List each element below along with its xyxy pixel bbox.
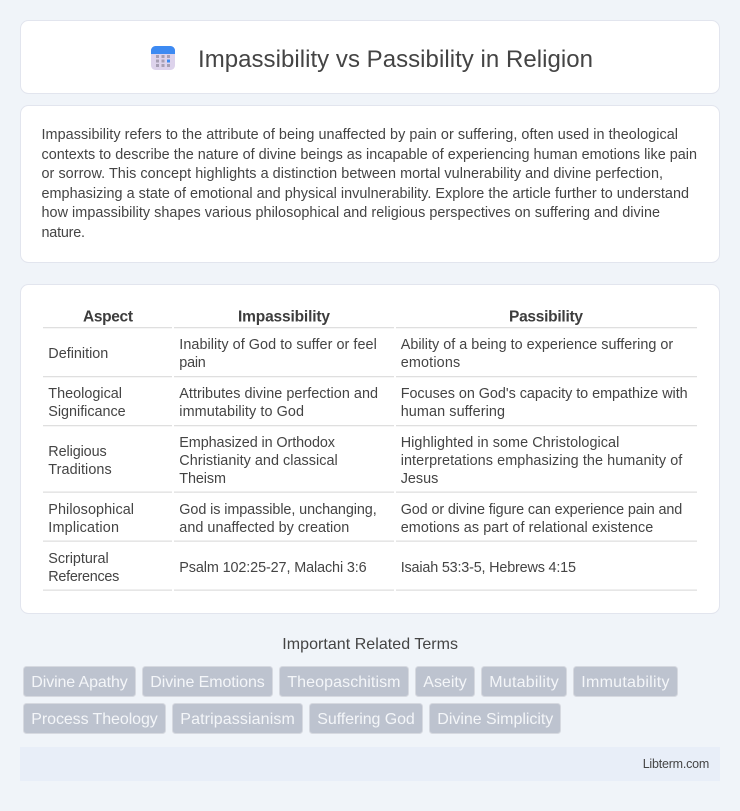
table row: philosophical implication: Implication [48,520,119,536]
tag list: related terms [24,666,678,734]
tag: Divine Emotions: Divine Emotions [150,674,265,691]
table header row [43,308,697,328]
icon: calendar [151,46,175,70]
table row: religious traditions: Emphasized in Orthodox [179,435,336,451]
table row: definition: pain [179,355,206,371]
table row: scriptural references: Isaiah 53:3-5, Hebrews 4:15 [401,560,576,576]
table header row: Impassibility [238,308,330,326]
table row: definition: Ability of a being to experience suffering or [401,337,673,353]
table row: religious traditions: Religious [48,444,107,460]
table header row: Passibility [509,308,583,326]
table row: theological significance: Significance [48,404,126,420]
table row: theological significance: Theological [48,386,122,402]
table row: theological significance: Focuses on God's capacity to empathize with [401,386,688,402]
text block: introduction paragraph: how impassibility shapes various philosophical and religious perspectives on suffering and divine [42,205,660,221]
table row: scriptural references: Psalm 102:25-27, Malachi 3:6 [179,560,367,576]
table row: scriptural references: Scriptural [48,551,109,567]
tag: Aseity [416,666,474,696]
table row: scriptural references: References [48,569,119,585]
tag: Mutability [482,666,566,696]
tag: Divine Apathy [24,666,136,696]
tag: Theopaschitism: Theopaschitism [287,674,400,691]
heading: important related terms: Important Related Terms [282,636,458,653]
tag: Immutability [574,666,678,696]
table row: philosophical implication: God is impassible, unchanging, [179,502,377,518]
table row: philosophical implication: God or divine figure can experience pain and [401,502,682,518]
tag: Theopaschitism [280,666,408,696]
text block: introduction paragraph: emphasizing a state of emotional and physical invulnerability. Explore the article further to understand [42,186,689,202]
table header row: Aspect [83,308,133,326]
text block: introduction paragraph: or sorrow. This concept highlights a distinction between mortal vulnerability and divine perfection, [42,166,663,182]
table row: religious traditions: Highlighted in some Christological [401,435,619,451]
tag: Aseity: Aseity [423,674,467,691]
text block: introduction paragraph: contexts to describe the nature of divine beings as incapable of experiencing human emotions like pain [42,147,697,163]
footer [20,747,720,781]
tag: Divine Simplicity [430,704,560,734]
table row: philosophical implication [43,502,697,542]
table row: definition: emotions [401,355,460,371]
table row: definition: Inability of God to suffer or feel [179,337,377,353]
text block: introduction paragraph: Impassibility refers to the attribute of being unaffected by pain or suffering, often used in theological [42,127,678,143]
table row: religious traditions [43,435,697,493]
tag: Suffering God [310,704,422,734]
title: Impassibility vs Passibility in Religion [198,46,593,73]
table row: religious traditions: Christianity and classical [179,453,338,469]
text block: introduction paragraph: nature. [42,225,85,241]
table row: religious traditions: Theism [179,471,226,487]
tag: Patripassianism: Patripassianism [180,711,295,728]
tag: Mutability: Mutability [489,674,559,691]
table row: philosophical implication: emotions as part of relational existence [401,520,653,536]
tag: Divine Emotions [142,666,272,696]
table row: theological significance [43,386,697,426]
table row: theological significance: human suffering [401,404,505,420]
table row: philosophical implication: and unaffected by creation [179,520,349,536]
tag: Patripassianism [172,704,302,734]
tag: Suffering God: Suffering God [317,711,415,728]
table row: theological significance: immutability to God [179,404,304,420]
tag: Divine Apathy: Divine Apathy [31,674,128,691]
panel: introduction [20,106,720,262]
table row: theological significance: Attributes divine perfection and [179,386,378,402]
table row: religious traditions: Jesus [401,471,438,487]
panel: header [20,20,720,94]
table row: definition [43,337,697,377]
table row: philosophical implication: Philosophical [48,502,134,518]
table row: scriptural references [43,551,697,591]
tag: Divine Simplicity: Divine Simplicity [437,711,553,728]
tag: Process Theology [24,704,166,734]
text block: introduction paragraph [42,127,697,241]
tag: Process Theology: Process Theology [31,711,158,728]
panel: comparison table [20,284,720,614]
table row: religious traditions: Traditions [48,462,112,478]
footer credit: Libterm.com [643,757,709,771]
table row: religious traditions: interpretations emphasizing the humanity of [401,453,683,469]
table row: definition: Definition [48,346,108,362]
tag: Immutability: Immutability [581,674,670,691]
